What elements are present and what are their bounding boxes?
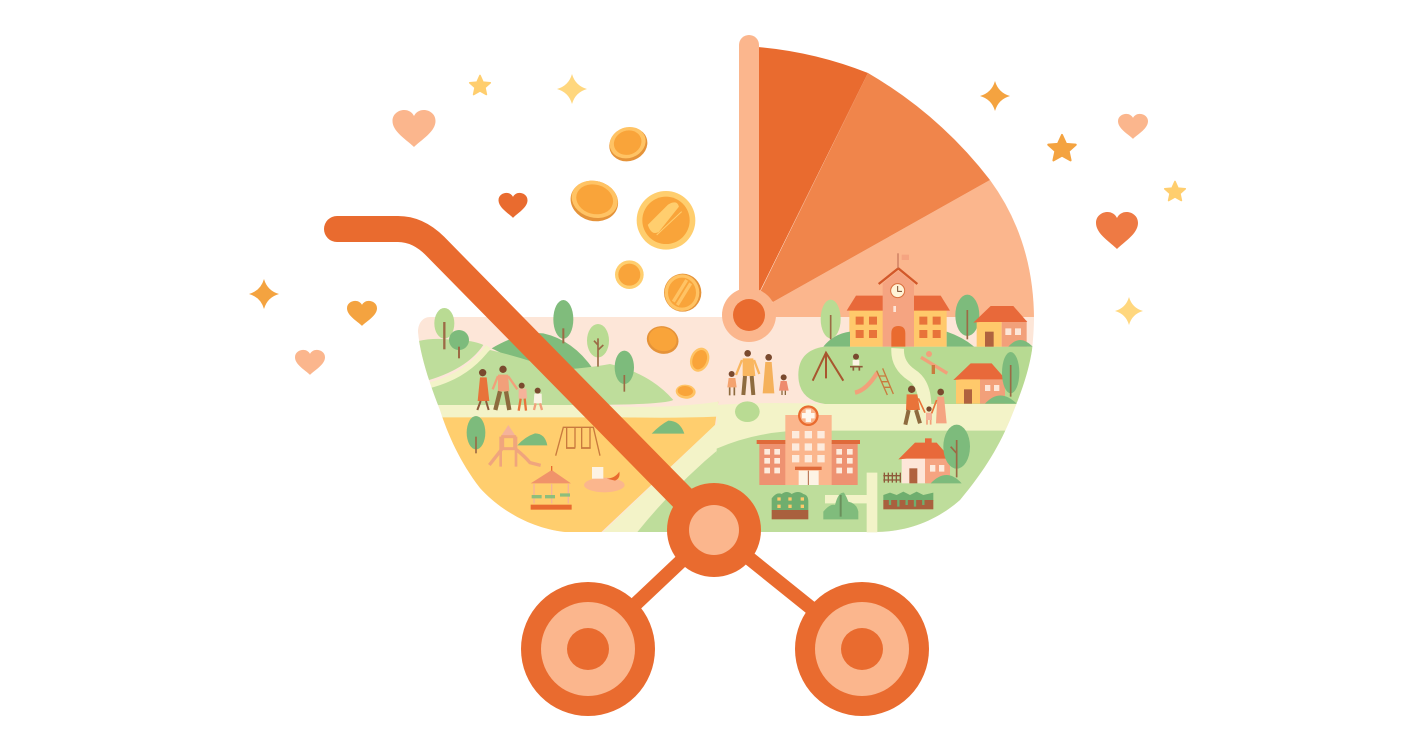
falling coins in basket (644, 323, 713, 400)
far dark hill (492, 333, 592, 369)
canopy (758, 47, 1034, 320)
heart: dark small (498, 193, 528, 218)
winding path (898, 348, 925, 407)
swing set (556, 427, 600, 456)
family of four (477, 366, 542, 411)
ground: left half (410, 333, 722, 535)
vegetable garden (883, 492, 933, 509)
trees (434, 300, 634, 453)
hub of canopy (722, 35, 776, 342)
stroller handle (337, 229, 714, 530)
family on pink ground (727, 350, 789, 395)
basket ground (410, 317, 1040, 540)
heart: pale lower left (295, 350, 325, 375)
coin 3 (637, 191, 695, 250)
seesaw (921, 351, 947, 374)
coin 1 (604, 122, 652, 167)
house: upper right (973, 306, 1033, 347)
coins (566, 122, 701, 312)
axle hub (667, 483, 761, 577)
pale road (410, 402, 718, 418)
heart: orange right (1096, 212, 1138, 249)
heart: gold (347, 301, 377, 326)
heart: pale large left (392, 110, 436, 147)
left wheel (521, 582, 655, 716)
house: middle right (953, 352, 1019, 404)
pond (735, 401, 760, 422)
slide (855, 368, 893, 395)
star: far right (1165, 182, 1185, 201)
carousel (531, 466, 572, 510)
heart: pale right (1118, 114, 1148, 139)
coin 5 (664, 274, 701, 312)
garden paths (825, 473, 877, 532)
sparkle: right (1115, 297, 1143, 325)
pale road (717, 403, 1020, 453)
coin 4 (615, 260, 644, 289)
scene objects: left half (434, 300, 713, 510)
flower garden (772, 492, 808, 519)
sparkle: top pale (557, 74, 587, 104)
child on bench (850, 354, 863, 371)
stroller legs (588, 530, 862, 649)
right wheel (795, 582, 929, 716)
school (847, 253, 950, 347)
trees and bushes by school (821, 295, 979, 347)
lower left green (638, 451, 717, 532)
ground: right half (717, 347, 1037, 537)
lower green field (717, 430, 1010, 537)
star: top (470, 76, 490, 95)
left hill (419, 338, 484, 380)
family on road (905, 386, 947, 425)
swing frame (813, 353, 843, 381)
coin 2 (566, 175, 623, 227)
upper green park (798, 347, 1037, 404)
bushes (517, 421, 684, 445)
bush garden (823, 493, 858, 519)
sandbox (584, 467, 625, 492)
slide tower (489, 425, 541, 467)
hospital (757, 405, 860, 485)
main hill (423, 350, 673, 405)
yellow park ground (442, 402, 718, 532)
infographic: stroller filled with a town (249, 35, 1186, 716)
house: lower right (883, 425, 970, 483)
diagonal pale road (604, 424, 716, 532)
curved path (427, 347, 488, 386)
sparkle: top right (980, 81, 1010, 111)
sparkle: left (249, 279, 279, 309)
scene objects: right half (727, 253, 1033, 532)
star: right orange (1048, 135, 1076, 160)
